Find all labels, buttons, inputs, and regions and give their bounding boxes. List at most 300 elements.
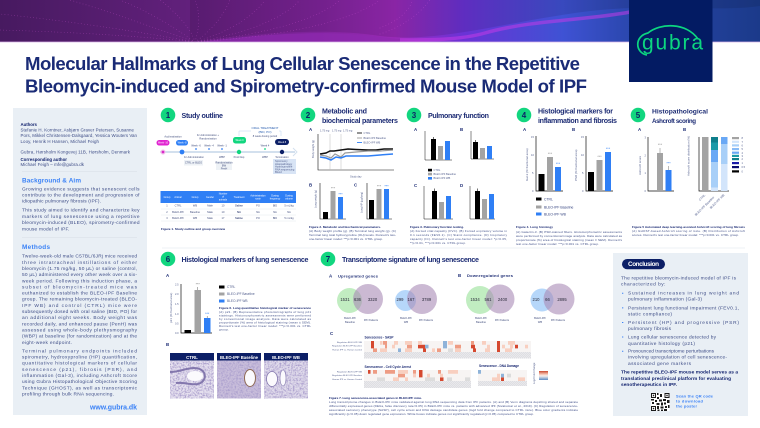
figure 4 caption <box>516 225 622 246</box>
bar chart: Gal-3: *** <box>548 152 553 156</box>
venn diagram: BLEO-IPF Baseline vs IPF patients, down <box>466 284 514 324</box>
stacked bar chart: Ashcroft distribution: BLEO-IPF Baseline <box>694 195 715 217</box>
section 7: transcriptome signature of lung senescence: C <box>330 331 334 336</box>
bar chart: p21: 1.0 <box>175 312 179 316</box>
heatmap: cell cycle arrest: Human IPF vs. Human Control <box>332 378 363 381</box>
bar chart: Ashcroft score: *** <box>658 143 663 147</box>
table: group overview: Administration <box>250 194 266 198</box>
legend: BLEO-IPF Baseline <box>434 172 457 176</box>
text: conclusion: static compliance) <box>628 312 672 318</box>
table: group overview: 10 <box>222 210 225 214</box>
figure 6 caption <box>219 306 312 332</box>
table: group overview: route <box>255 198 261 200</box>
table: group overview: BID <box>273 216 277 220</box>
timeline: Spirometry <box>275 159 288 163</box>
heatmap: SASP: Regulation BLEO-IPF WB <box>337 341 363 344</box>
figure 6 caption: proportionate (%) area of histological staining (mean ± SEM). <box>219 320 311 324</box>
timeline: Week -8 <box>178 142 187 144</box>
bar chart: Gal-3: 15 <box>531 135 534 139</box>
timeline: 8 week dosing period <box>253 134 278 138</box>
panel: authors, background and methods <box>13 108 147 415</box>
table: group overview: NA <box>237 210 241 214</box>
stacked bar chart: Ashcroft distribution: 3 <box>742 154 744 158</box>
venn diagram: BLEO-IPF WB vs IPF patients, down: 210 <box>532 297 540 302</box>
figure 6 caption: Dunnett's test one-factor linear model: ***p<0.001 vs. CTRL <box>219 324 311 328</box>
bar chart: PSR: PSR (% fractional area) <box>574 149 578 181</box>
authors: Michael Feigh – mfe@gubra.dk <box>20 162 85 167</box>
figure 7 caption: significantly (p<0.05) down regulated gene expression. White boxes indicate genes not significantly regulated (p>0.05) compared to CTRL group. <box>329 412 534 416</box>
heading <box>538 108 617 125</box>
venn diagram: BLEO-IPF Baseline vs IPF patients, up: 1531 <box>340 297 350 302</box>
table: group overview: 5 mL/kg <box>284 204 294 208</box>
text: methods: bleomycin (1.75 mg/kg, 50 µL) or saline (control, <box>22 266 137 272</box>
text: methods: Terminal pulmonary endpoints included <box>22 348 137 354</box>
legend: CTRL <box>544 198 553 202</box>
bar chart: Ashcroft score: *** <box>666 162 671 166</box>
text: methods: three intratracheal instillations of either <box>22 260 137 266</box>
table: group overview: 5 mL/kg <box>284 216 294 220</box>
authors: Gubra, Hørsholm Kongevej 11B, Hørsholm, Denmark <box>20 150 131 154</box>
heatmap: cell cycle arrest <box>332 365 471 388</box>
timeline: PenH <box>221 166 227 170</box>
text: methods: quantitative histological markers of cellular <box>22 361 137 367</box>
figure 7 caption: Lung transcriptome changes in BLEO-IPF mice validated against lung RNA sequencing data from IPF patients. (A) and (B) Venn diagrams depicting shared and separate <box>329 400 578 404</box>
venn diagram: BLEO-IPF Baseline vs IPF patients, down: 1534 <box>470 297 480 302</box>
color scale legend: Log2 Fold Change <box>532 362 536 384</box>
table: group overview: Treatment <box>234 196 245 199</box>
line chart: body weight: 1.75 mg <box>320 128 330 132</box>
text: conclusion <box>621 276 739 367</box>
timeline: Blood <box>275 170 282 174</box>
stacked bar chart: Ashcroft distribution: 0 <box>742 170 744 174</box>
timeline: RNA sequencing <box>275 167 295 171</box>
QR caption: Scan the QR code <box>676 393 714 398</box>
stacked bar chart: Ashcroft distribution: 4 <box>742 151 744 155</box>
conclusion badge: Conclusion <box>628 261 659 268</box>
table: group overview: BLEO-IPF <box>172 216 184 220</box>
table: group overview: Number <box>219 192 227 196</box>
QR caption: to download <box>676 398 704 403</box>
text: conclusion: The repetitive bleomycin-induced model of IPF is <box>621 276 737 282</box>
section 3: pulmonary function: D <box>460 183 463 188</box>
section 5: histopathological Ashcroft scoring: A <box>638 127 642 132</box>
text: conclusion statement: translational preclinical platform for evaluating <box>621 376 731 382</box>
venn diagram: BLEO-IPF WB vs IPF patients, up <box>395 284 437 324</box>
table: group overview: WB <box>193 216 197 220</box>
timeline: (BID, PO) <box>258 130 272 134</box>
bar chart: p21: 1.5 <box>175 302 179 306</box>
table: group overview <box>160 191 296 221</box>
figure 4 caption: (A) Galectin-3. (B) PSR-stained fibers. Histomorphometric assessments <box>516 230 622 234</box>
section 5: histopathological Ashcroft scoring: B <box>683 127 686 132</box>
stacked bar chart: Ashcroft distribution: 8 <box>742 136 744 140</box>
text: methods: week period. Following this induction phase, a <box>22 278 137 284</box>
figure 3 caption: **p<0.01, ***p<0.001 vs. CTRL group. <box>410 241 466 245</box>
text: methods: recorded daily, and enhanced pause (PenH) was <box>22 321 138 327</box>
table: group overview: Dosing <box>285 194 293 198</box>
text: background and aim: mouse model of IPF. <box>22 226 70 232</box>
table: group overview: BID <box>273 204 277 208</box>
heading <box>322 108 398 125</box>
timeline: WBP <box>219 155 225 159</box>
heatmap: cell cycle arrest: Regulation BLEO-IPF WB <box>337 370 363 374</box>
heading: Histopathological <box>652 108 708 116</box>
timeline: Week -6 <box>191 144 201 148</box>
text: conclusion statement: senotherapeutics in IPF. <box>621 382 677 388</box>
icon: number 1: 1 <box>166 111 171 120</box>
timeline: Termination <box>275 155 289 159</box>
bar chart: Ashcroft score: Ashcroft score <box>638 155 642 175</box>
authors: Looy, Henrik H Hansen, Michael Feigh <box>20 139 100 144</box>
text: background and aim: contribute to the development and progression of <box>22 193 140 199</box>
text: methods: an additional eight weeks. Body weight was <box>22 315 138 321</box>
figure 6 caption: Figure 6. Lung quantitative histological marker of senescence <box>219 306 311 310</box>
table: group overview: NA <box>256 210 260 214</box>
timeline: Fc Administration + <box>197 133 220 137</box>
timeline: Week 4 <box>261 144 270 148</box>
text: methods: IPF WB) and control (CTRL) mice were <box>22 303 137 309</box>
table: group overview: Animal <box>174 196 182 199</box>
figure 6 caption: stainings. Histomorphometric assessments were performed <box>219 313 311 317</box>
QR code <box>651 393 670 411</box>
stacked bar chart: Ashcroft distribution: 0.5 <box>742 165 746 169</box>
venn diagram: BLEO-IPF Baseline vs IPF patients, down: Baseline <box>476 320 487 324</box>
text: methods: subset of bleomycin-treated mice was <box>22 284 138 290</box>
heading: Pulmonary function <box>428 112 489 120</box>
line chart: body weight: BLEO-IPF WB <box>364 140 380 144</box>
timeline: Week 8 <box>278 141 287 144</box>
authors <box>20 122 138 167</box>
table: group overview: volume <box>285 198 294 200</box>
text: conclusion statement <box>621 370 738 388</box>
heading: A upregulated genes: Upregulated genes <box>338 274 379 278</box>
heading: Histological markers for <box>538 108 613 116</box>
figure 4 caption: test one-factor linear model: ***p<0.001 vs. CTRL group. <box>516 242 599 246</box>
figure 6 caption: (A) p21. (B) Representative photomicrographs of lung p21 <box>219 310 311 314</box>
text: conclusion: Persistent lung functional impairment (FEV0.1, <box>628 306 739 312</box>
section 6: histological markers of lung senescence: B <box>166 342 169 347</box>
figure 5 caption: (A) GHOST-based Ashcroft scoring of mice. (B) Distribution of Ashcroft <box>632 229 745 233</box>
authors: Stefanie H. Korntner, Asbjørn Graver Petersen, Susanne <box>20 128 135 132</box>
figure 4 caption: Figure 4. Lung histology <box>516 225 553 229</box>
stacked bar chart: Ashcroft distribution <box>686 136 746 217</box>
figure 2 caption: one-factor linear model: ***p<0.001 vs. CTRL group. <box>309 237 383 241</box>
logo <box>629 0 712 82</box>
heatmap: SASP: Human IPF vs. Human Control <box>332 348 363 351</box>
heading <box>652 108 708 125</box>
logo: gubra <box>642 32 703 54</box>
website link: www.gubra.dk <box>89 405 137 412</box>
section 4: histological markers for inflammation and fibrosis: B <box>572 127 575 132</box>
table: group overview: 3 <box>166 216 168 220</box>
figure 2 caption <box>309 225 396 241</box>
table: group overview: 10 <box>222 204 225 208</box>
text: methods: eight-week endpoint. <box>22 340 72 346</box>
bar chart: p21: 2.0 <box>175 292 179 296</box>
micrograph: CTRL <box>170 353 214 398</box>
text: background and aim: markers of lung senescence using a repetitive <box>22 214 140 220</box>
heading: B downregulated genes: Downregulated genes <box>467 273 514 278</box>
text: conclusion statement: The repetitive BLEO-IPF mouse model serves as a <box>621 370 738 376</box>
heading: inflammation and fibrosis <box>538 117 617 125</box>
table: group overview: Group <box>192 196 199 199</box>
bar chart: p21: *** <box>196 282 200 286</box>
section 6: histological markers of lung senescence: A <box>166 273 170 278</box>
bar chart: hydroxyproline <box>360 183 392 219</box>
table: group overview: Gender <box>206 196 214 199</box>
table: group overview: 17 <box>222 216 225 220</box>
venn diagram: BLEO-IPF WB vs IPF patients, up: IPF Patients <box>419 318 434 322</box>
color scale legend <box>532 362 548 384</box>
table: group overview: WB <box>193 204 197 208</box>
bar chart: p21 <box>169 282 212 335</box>
bar chart: PSR <box>574 135 613 193</box>
venn diagram: BLEO-IPF WB vs IPF patients, up: 299 <box>396 297 404 302</box>
text: conclusion: Persistent (HP) and progressive (PSR) <box>628 320 739 326</box>
line chart: body weight: 1.75 mg <box>332 128 342 132</box>
bar chart: Ashcroft score <box>638 136 674 193</box>
figure 4 caption: were performed by conventional image analysis. Data were calculated as <box>516 234 622 238</box>
text: methods: subsequently dosed with oral saline (BID, PO) for <box>22 309 137 315</box>
figure 2 caption: Figure 2. Metabolic and biochemical parameters. <box>309 225 381 229</box>
figure 3 caption: capacity (IC). Dunnett's test one-factor linear model: *p<0.05, <box>410 237 507 241</box>
heatmap: SASP <box>332 336 531 358</box>
heading: Transcriptome signature of lung senescence <box>342 256 479 264</box>
section 4: histological markers for inflammation and fibrosis: A <box>523 127 527 132</box>
bar chart: FEV0.1 <box>471 131 494 159</box>
table: group overview: 1 <box>166 204 168 208</box>
figure 6 caption: group. <box>219 328 229 332</box>
legend: CTRL <box>434 168 441 172</box>
stacked bar chart: Ashcroft distribution: 2 <box>742 157 744 161</box>
timeline: CTRL or BLEO <box>185 161 202 165</box>
figure 7 caption: associated secretory phenotype (SASP), cell cycle arrest and DNA damage candidate genes (log2 fold change compared to CTRL mice). Blue color gradients indicate <box>329 408 578 412</box>
line chart: body weight: BLEO-IPF Baseline <box>364 136 387 140</box>
heading: Ashcroft scoring <box>652 118 696 125</box>
heatmap: SASP: Regulation BLEO-IPF Baseline <box>332 345 363 348</box>
stacked bar chart: Ashcroft distribution: CTRL <box>698 193 706 202</box>
bar chart: static compliance <box>424 186 453 219</box>
figure 5 caption: scores. Dunnett's test one-factor linear model: ***p<0.001 vs. CTRL group. <box>632 233 739 237</box>
timeline: Week -4 <box>204 144 214 148</box>
legend <box>219 285 255 303</box>
figure 6 caption: by conventional image analysis. Data were calculated as <box>219 317 312 321</box>
bar chart: lung weight: Lung weight (g) <box>314 190 318 208</box>
text: methods: group. The remaining bleomycin-treated (BLEO- <box>22 297 137 303</box>
stacked bar chart: Ashcroft distribution: Ashcroft score distribution (%) <box>686 136 690 176</box>
venn diagram: BLEO-IPF WB vs IPF patients, up: BLEO-IPF <box>400 316 412 320</box>
heading: background and aim: Background & Aim <box>22 177 81 184</box>
micrograph: CTRL: CTRL <box>186 355 198 360</box>
timeline: Hydroxyproline <box>275 165 293 169</box>
legend: CTRL <box>227 285 236 289</box>
line chart: body weight: Study day <box>350 174 362 178</box>
bar chart: PSR: 0 <box>582 189 584 193</box>
timeline: Fc Administration <box>184 155 204 159</box>
conclusion badge <box>622 259 665 269</box>
text: background and aim: This study aimed to identify and characterize key <box>22 208 140 214</box>
heatmap: DNA damage <box>478 364 527 386</box>
venn diagram: BLEO-IPF WB vs IPF patients, down: WB <box>538 320 542 324</box>
figure 7 caption: Figure 7. Lung senescence-associated genes in BLEO-IPF mice. <box>329 396 422 400</box>
section 4: histological markers for inflammation and fibrosis <box>516 108 622 246</box>
text: conclusion: pulmonary inflammation (Gal-3) <box>628 297 702 303</box>
section 6: histological markers of lung senescence <box>161 252 312 398</box>
panel: conclusion <box>613 253 748 416</box>
text: methods: assessed using whole-body plethysmography <box>22 328 138 334</box>
venn diagram: BLEO-IPF WB vs IPF patients, down: 2895 <box>557 297 567 302</box>
venn diagram: BLEO-IPF WB vs IPF patients, down <box>530 284 574 324</box>
legend <box>536 198 574 216</box>
timeline: Pool Dep <box>234 155 245 159</box>
venn diagram: BLEO-IPF WB vs IPF patients, down: IPF Patients <box>551 318 566 322</box>
section 2: metabolic and biochemical parameters: A <box>309 127 313 132</box>
bar chart: Ashcroft score: 3 <box>644 136 646 140</box>
bar chart: Gal-3: Gal-3 (% fractional area) <box>525 148 529 181</box>
timeline: Histopathology <box>275 162 293 166</box>
bar chart: Ashcroft score: 0 <box>644 189 646 193</box>
legend: BLEO-IPF WB <box>227 299 248 303</box>
section 2: metabolic and biochemical parameters: B <box>309 182 312 188</box>
bar chart: FVC <box>425 131 452 160</box>
legend: BLEO-IPF Baseline <box>544 205 574 209</box>
header banner <box>0 0 760 42</box>
venn diagram: BLEO-IPF Baseline vs IPF patients, up: 636 <box>354 297 362 302</box>
text: background and aim: bleomycin-induced (BLEO), spirometry-confirmed <box>22 220 140 226</box>
icon: number 5: 5 <box>636 111 641 120</box>
bar chart: PSR: 5 <box>582 171 584 175</box>
heading: biochemical parameters <box>322 117 398 125</box>
figure 5 caption: Figure 5 Automated deep learning-assisted Ashcroft scoring of lung fibrosis <box>632 225 745 229</box>
timeline: Week -1 <box>217 144 227 148</box>
legend: BLEO-IPF Baseline <box>227 292 255 296</box>
table: group overview: Baseline <box>190 210 201 214</box>
timeline: Randomization <box>199 136 217 140</box>
venn diagram: BLEO-IPF Baseline vs IPF patients, up <box>337 284 383 324</box>
text: methods: using Gubra Histopathological Objective Scoring <box>22 379 137 385</box>
bar chart: Ashcroft score: 2 <box>644 154 646 158</box>
legend: BLEO-IPF WB <box>544 212 567 216</box>
venn diagram: BLEO-IPF WB vs IPF patients, up: 167 <box>408 297 415 302</box>
table: group overview: of <box>222 196 224 198</box>
QR caption <box>676 393 714 408</box>
stacked bar chart: Ashcroft distribution: 7 <box>742 140 744 144</box>
line chart: body weight: Body weight (g) <box>311 140 315 158</box>
timeline: BW <box>222 164 227 168</box>
text: background and aim <box>22 187 140 232</box>
heatmap: cell cycle arrest: Senescence - Cell Cycle Arrest <box>364 365 412 369</box>
text: conclusion: Pronounced transcriptome perturbations <box>628 349 715 355</box>
line chart: body weight: 1.75 mg <box>343 128 353 132</box>
figure 3 caption: (A) Forced vital capacity (FVC). (B) Forced expiratory volume in <box>410 229 507 233</box>
text: conclusion: Lung cellular senescence detected by <box>628 334 717 340</box>
bar chart: Gal-3: *** <box>556 162 561 166</box>
section 5: histopathological Ashcroft scoring <box>631 108 746 237</box>
timeline: Acclimatization <box>164 134 182 138</box>
authors: Authors <box>20 122 38 127</box>
authors: Corresponding author <box>20 157 67 162</box>
heading: B downregulated genes: B <box>458 273 461 278</box>
bar chart: p21: 0.5 <box>175 322 179 326</box>
title <box>25 53 587 96</box>
text: methods <box>22 254 138 397</box>
text: conclusion: associated gene markers <box>628 361 692 367</box>
venn diagram: BLEO-IPF WB vs IPF patients, up: 3789 <box>422 297 432 302</box>
bar chart: p21: *** <box>205 312 210 316</box>
figure 4 caption: proportionate (%) area of histological staining (mean ± SEM). Dunnett's <box>516 238 622 242</box>
venn diagram: BLEO-IPF Baseline vs IPF patients, up: BLEO-IPF <box>344 316 356 320</box>
timeline: Week -10 <box>158 142 169 144</box>
heading: A upregulated genes: A <box>329 274 333 278</box>
bar chart: PSR: *** <box>606 147 611 151</box>
figure 7 caption: differentially expressed genes (DEGs, false discovery rate<0.05) in BLEO-IPF mice vs. patients with advanced IPF (Sivakumar et al., 2019). (C) Regulation of senescence- <box>329 404 578 408</box>
timeline: Week 0 <box>235 139 244 142</box>
text: methods: spirometry, hydroxyproline (HP) quantification, <box>22 354 137 360</box>
legend: BLEO-IPF WB <box>434 176 450 180</box>
table: group overview: Male <box>207 204 213 208</box>
bar chart: hydroxyproline: *** <box>384 184 389 188</box>
venn diagram: BLEO-IPF WB vs IPF patients, down: 66 <box>545 297 550 302</box>
icon: number 1 <box>161 108 175 122</box>
heatmap: SASP: Senescence - SASP <box>364 336 394 340</box>
section 2: metabolic and biochemical parameters: C <box>354 182 358 188</box>
micrograph: BLEO-IPF Baseline: BLEO-IPF Baseline <box>220 355 259 360</box>
table: group overview: 2 <box>166 210 168 214</box>
bar chart: inspiratory capacity <box>470 186 495 219</box>
bar chart: Gal-3: 5 <box>532 171 534 175</box>
bar chart: lung weight <box>314 183 346 219</box>
table: group overview: PO <box>256 216 260 220</box>
bar chart: Gal-3: 0 <box>532 189 534 193</box>
bar chart: Gal-3: 10 <box>531 153 534 157</box>
figure 1 caption: Figure 1. Study outline and group overview <box>161 227 226 231</box>
table: group overview: Saline <box>235 204 243 208</box>
text: background and aim: idiopathic pulmonary fibrosis (IPF). <box>22 199 101 205</box>
figure 7 caption <box>329 396 578 416</box>
heading: Histological markers of lung senescence <box>182 256 309 264</box>
venn diagram: BLEO-IPF Baseline vs IPF patients, down: BLEO-IPF <box>475 316 487 320</box>
table: group overview: Group <box>164 196 171 199</box>
stacked bar chart: Ashcroft distribution: 1 <box>742 161 744 165</box>
figure 3 caption: 0.1 seconds (FEV0.1). (C) Static compliance. (D) Inspiratory <box>410 233 508 237</box>
text: conclusion: involving upregulation of cell senescence- <box>628 355 727 361</box>
title: Molecular Hallmarks of Lung Cellular Senescence in the Repetitive <box>25 53 580 74</box>
text: conclusion: Sustained increases in lung weight and <box>628 291 739 297</box>
text: methods: senescence (p21), fibrosis (PSR), and <box>22 367 137 373</box>
bar chart: PSR: *** <box>597 155 602 159</box>
micrograph: BLEO-IPF WB <box>264 353 308 398</box>
bar chart: lung weight: *** <box>338 192 343 196</box>
section 2: metabolic and biochemical parameters <box>301 108 398 241</box>
bar chart: p21: 0.0 <box>175 331 179 335</box>
table: group overview: PO <box>256 204 260 208</box>
table: group overview: NA <box>287 210 291 214</box>
heading: methods: Methods <box>22 244 50 251</box>
timeline <box>156 126 297 174</box>
venn diagram: BLEO-IPF Baseline vs IPF patients, down: 2400 <box>498 297 508 302</box>
icon: number 6 <box>161 252 175 266</box>
icon: number 6: 6 <box>166 255 171 264</box>
bar chart: PSR: 15 <box>581 135 584 139</box>
authors: Pors, Mikkel Christensen-Dalsgaard, Yessica Wouters Van <box>20 133 138 138</box>
table: group overview: NA <box>273 210 277 214</box>
micrograph: BLEO-IPF Baseline <box>217 353 261 398</box>
timeline: Randomization <box>215 160 233 164</box>
bar chart: PSR: 10 <box>581 153 584 157</box>
text: methods: 50 µL) administered every other week over a six- <box>22 272 137 278</box>
icon: number 4: 4 <box>522 111 527 120</box>
line chart: body weight <box>311 128 394 178</box>
